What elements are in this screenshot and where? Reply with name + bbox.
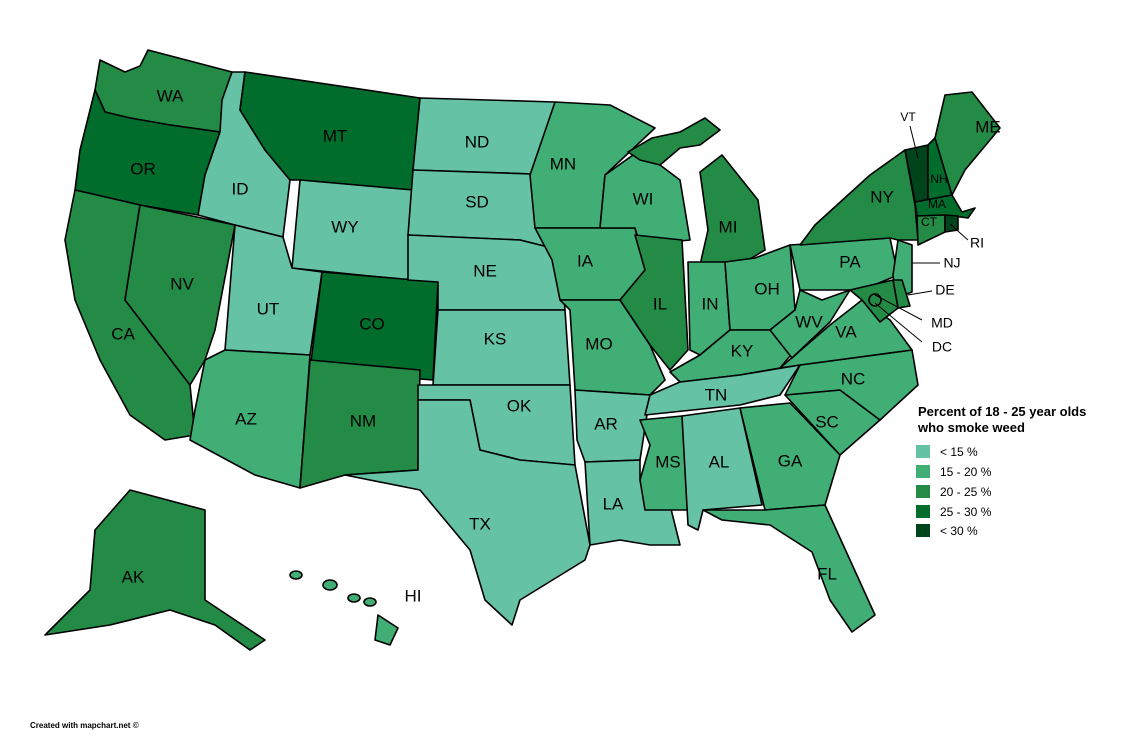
state: MD bbox=[850, 280, 898, 322]
state labels: NH bbox=[930, 172, 948, 186]
state: NJ bbox=[893, 240, 912, 298]
state: VT bbox=[905, 145, 928, 202]
state labels: AK bbox=[122, 567, 145, 586]
state: VA bbox=[780, 300, 912, 368]
legend: 15 - 20 % bbox=[940, 465, 992, 479]
state labels: NJ bbox=[943, 255, 961, 271]
state labels: AZ bbox=[235, 409, 257, 428]
state labels: DE bbox=[935, 282, 955, 298]
state: GA bbox=[740, 403, 840, 510]
state labels: PA bbox=[839, 252, 861, 271]
state labels: OH bbox=[754, 279, 780, 298]
state: MT bbox=[240, 72, 420, 190]
state: ID bbox=[198, 72, 290, 237]
state: MI upper bbox=[628, 118, 720, 165]
state: AL bbox=[682, 408, 762, 530]
legend: < 15 % bbox=[940, 445, 978, 459]
legend bbox=[916, 404, 1086, 538]
state: MN bbox=[530, 102, 655, 228]
state labels: CO bbox=[359, 314, 385, 333]
map: united states bbox=[45, 50, 1000, 650]
state labels: MN bbox=[550, 154, 576, 173]
state labels: ID bbox=[232, 179, 248, 198]
state labels: SC bbox=[815, 412, 839, 431]
state: MO bbox=[560, 300, 665, 395]
legend: who smoke weed bbox=[917, 420, 1025, 435]
state labels: IL bbox=[653, 294, 667, 313]
state: ND bbox=[413, 98, 562, 175]
state: OH bbox=[725, 245, 795, 330]
state: MA bbox=[915, 195, 975, 218]
state labels: SD bbox=[465, 192, 489, 211]
state labels: NY bbox=[870, 187, 894, 206]
legend title: Percent of 18 - 25 year olds bbox=[918, 404, 1086, 419]
state: HI bbox=[290, 571, 398, 645]
state labels: UT bbox=[257, 299, 279, 318]
state labels: MI bbox=[719, 217, 737, 236]
state: MS bbox=[640, 416, 688, 510]
state labels: IA bbox=[577, 251, 594, 270]
credit: Created with mapchart.net © bbox=[30, 721, 139, 730]
state labels: FL bbox=[817, 564, 837, 583]
state: CA bbox=[65, 190, 195, 440]
state: SD bbox=[408, 170, 562, 250]
state: RI bbox=[945, 215, 958, 232]
state: WY bbox=[292, 180, 413, 280]
state: IN bbox=[688, 262, 730, 355]
state: NM bbox=[300, 360, 420, 488]
state labels: KY bbox=[731, 341, 753, 360]
state: ME bbox=[935, 92, 1000, 195]
state labels: RI bbox=[970, 235, 984, 251]
callout labels: VT bbox=[900, 110, 916, 124]
state labels: HI bbox=[404, 586, 422, 605]
state: AR bbox=[575, 390, 650, 462]
state: NH bbox=[928, 138, 952, 200]
state labels: WI bbox=[633, 189, 653, 208]
state: NY bbox=[800, 150, 918, 245]
legend: 20 - 25 % bbox=[940, 485, 992, 499]
state: SC bbox=[785, 390, 880, 455]
state: OK bbox=[418, 385, 575, 465]
state: IA bbox=[535, 228, 645, 300]
state: UT bbox=[225, 225, 322, 355]
state: WA bbox=[95, 50, 232, 132]
state: OR bbox=[75, 90, 220, 215]
state labels: MO bbox=[585, 334, 613, 353]
state: AZ bbox=[190, 350, 310, 488]
state: KS bbox=[433, 310, 570, 385]
state labels: NV bbox=[170, 274, 194, 293]
state: FL bbox=[703, 505, 875, 632]
state: NC bbox=[785, 350, 918, 420]
state labels: NC bbox=[841, 369, 865, 388]
state labels: VA bbox=[835, 322, 857, 341]
state: MI bbox=[700, 155, 765, 265]
state labels: WA bbox=[157, 86, 184, 105]
state: IL bbox=[620, 235, 688, 370]
state labels: IN bbox=[702, 294, 718, 313]
state labels: CT bbox=[921, 215, 938, 229]
state labels: MT bbox=[323, 126, 347, 145]
state: LA bbox=[585, 460, 680, 545]
state: CO bbox=[310, 272, 438, 380]
state: DE bbox=[893, 280, 910, 308]
state: KY bbox=[670, 330, 795, 382]
legend: < 30 % bbox=[940, 524, 978, 538]
state labels: AR bbox=[594, 414, 618, 433]
state labels: OR bbox=[130, 159, 156, 178]
state labels: DC bbox=[932, 339, 952, 355]
state labels: MA bbox=[928, 197, 946, 211]
state labels: TN bbox=[705, 385, 727, 404]
legend: 25 - 30 % bbox=[940, 505, 992, 519]
state labels: NM bbox=[350, 411, 376, 430]
state: WI bbox=[600, 150, 690, 245]
state labels: CA bbox=[111, 324, 135, 343]
state labels: LA bbox=[603, 494, 624, 513]
state: NE bbox=[408, 235, 565, 310]
state: TX bbox=[345, 400, 590, 625]
state labels: WY bbox=[331, 217, 359, 236]
state labels: MS bbox=[655, 452, 681, 471]
state: NV bbox=[125, 205, 235, 385]
state: WV bbox=[770, 290, 850, 358]
state labels: OK bbox=[507, 396, 532, 415]
state labels: ND bbox=[465, 132, 489, 151]
state: PA bbox=[790, 238, 898, 290]
state labels: WV bbox=[795, 312, 823, 331]
state labels: GA bbox=[778, 451, 803, 470]
state labels: KS bbox=[484, 329, 506, 348]
state labels: NE bbox=[473, 261, 497, 280]
state: AK bbox=[45, 490, 265, 650]
state: TN bbox=[645, 365, 800, 415]
state: CT bbox=[917, 215, 945, 245]
state labels bbox=[111, 86, 1001, 605]
state labels: MD bbox=[931, 315, 953, 331]
state labels: ME bbox=[975, 117, 1001, 136]
state: DC bbox=[869, 294, 881, 306]
state labels: AL bbox=[709, 452, 729, 471]
state labels: TX bbox=[469, 514, 491, 533]
